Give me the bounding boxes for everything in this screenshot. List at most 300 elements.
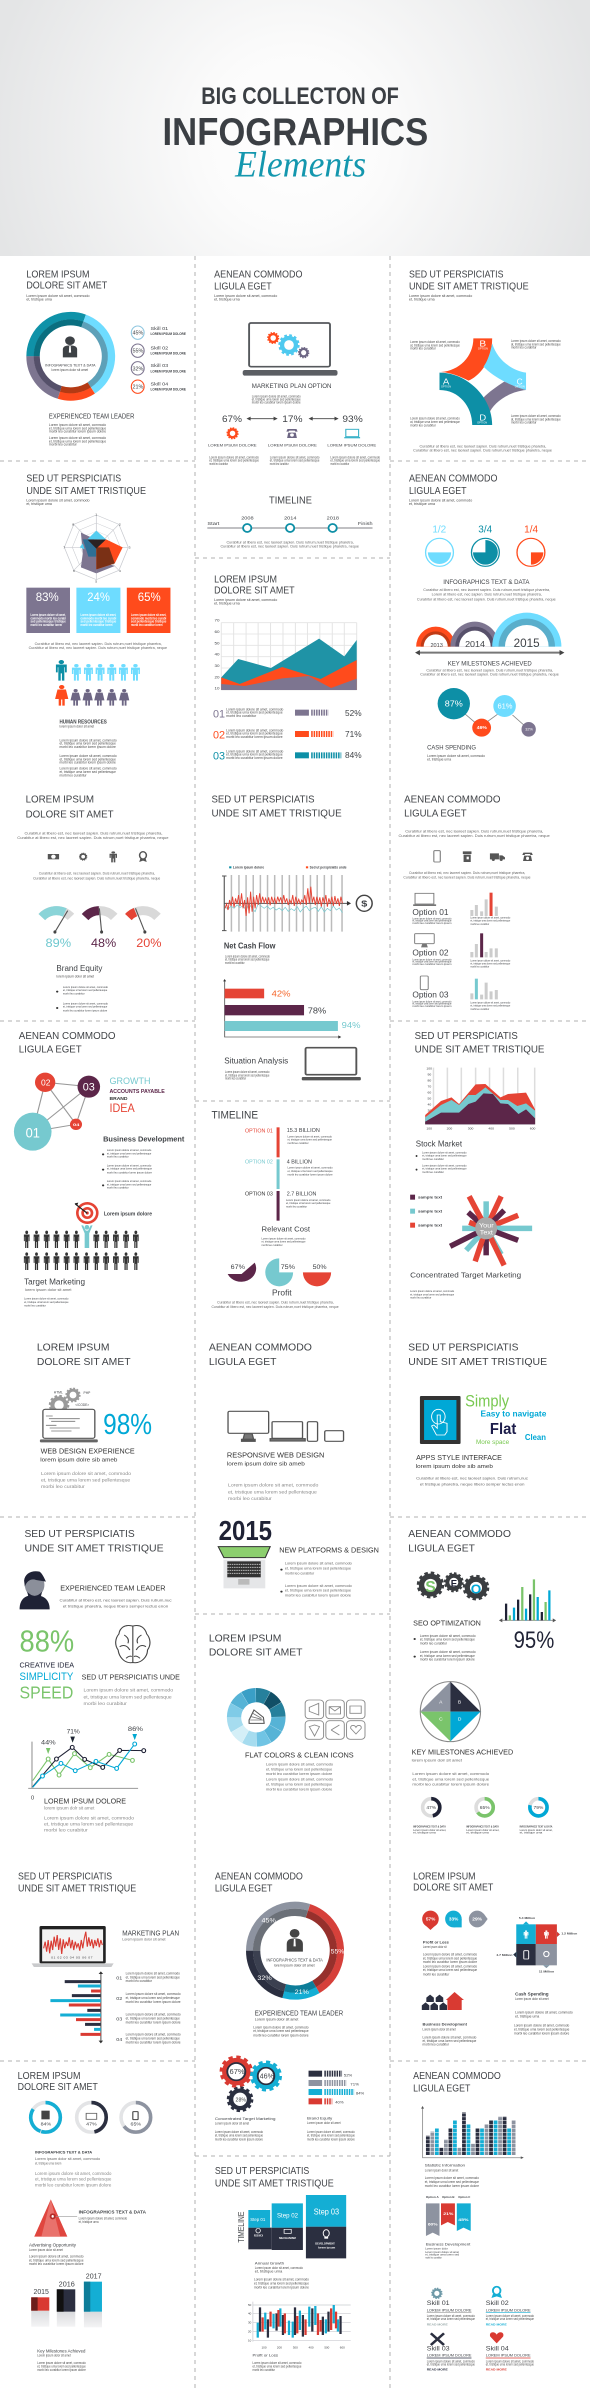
key milestones text: morbi leo curabitur lorem ipsum dolore (37, 2368, 86, 2372)
text block: INFOGRAPHICS TEXT & DATA (35, 2150, 92, 2154)
stat rows: 84% (345, 750, 362, 760)
icons row (227, 428, 360, 439)
caption (33, 871, 160, 880)
body text: morbi leo curabitur lorem ipsum dolore (266, 1771, 332, 1776)
bullets: Lorem ipsum dolore sit amet, commodo (285, 1561, 352, 1566)
statistic text: et, tristique urna lorem sed pellentesque (425, 2180, 479, 2184)
heading: UNDE SIT AMET TRISTIQUE (409, 281, 529, 292)
area chart: 40 (214, 652, 220, 657)
business development text: Lorem ipsum dolore sit amet, commodo (423, 2036, 476, 2039)
business development text: Lorem ipsum dolore sit amet, commodo (107, 1179, 152, 1183)
heading: SED UT PERSPICIATIS (409, 269, 503, 280)
skills grid: Lorem ipsum dolore sit amet, commodo (427, 2360, 475, 2363)
heading: LOREM IPSUM (26, 794, 94, 805)
square matrix: 1.2 Million (561, 1932, 577, 1936)
title: Elements (234, 144, 366, 185)
step blocks (248, 2195, 346, 2258)
vertical timeline: OPTION 03 (245, 1192, 273, 1197)
cash spending text: morbi leo curabitur lorem ipsum dolore (514, 2032, 569, 2035)
human resources text: morbi leo curabitur (59, 774, 87, 777)
stat: 95% (514, 1627, 554, 1654)
skills grid: Lorem ipsum dolore sit amet, commodo (427, 2314, 475, 2318)
heading (413, 1871, 494, 1893)
bullets: Lorem ipsum dolore sit amet, commodo (285, 1583, 352, 1588)
heading: DOLORE SIT AMET (37, 1357, 131, 1368)
milestone arches (415, 613, 564, 655)
donut chart: 32% (257, 1974, 272, 1982)
stat rows: 02 (213, 728, 225, 741)
numbered notes: morbi leo curabitur (126, 1979, 153, 1983)
numbered notes (116, 1972, 181, 2044)
concentrated target marketing text: et, tristique urna lorem sed pellentesque (410, 1293, 455, 1296)
caption: Curabitur at libero est, nec laoreet sapien. Duis rutrum,nuet tristique pharetra, (227, 540, 354, 544)
label: lorem ipsum dolre sib ameb (227, 1462, 305, 1468)
annual growth text: et, tristique urna (255, 2270, 282, 2274)
legend (229, 866, 347, 869)
advertising text: Lorem ipsum dolore sit amet, commodo (29, 2255, 84, 2259)
text block: morbi leo curabitur lorem ipsum dolore (35, 2183, 112, 2187)
heading (408, 1342, 547, 1368)
label and bullets: Lorem ipsum dolore sit amet, commodo (420, 1650, 476, 1654)
stat and keywords (20, 1624, 75, 1703)
heading: UNDE SIT AMET TRISTIQUE (24, 1543, 164, 1554)
stat rows: 52% (345, 708, 362, 718)
heading: SED UT PERSPICIATIS (18, 1871, 112, 1882)
icon: brain (116, 1626, 150, 1663)
stacked area chart: 200 (447, 1127, 453, 1130)
area chart: 10 (214, 686, 220, 691)
milestones text: KEY MILESTONES ACHIEVED (412, 1748, 514, 1756)
brand equity text: Lorem ipsum dolore sit amet, commodo (63, 985, 108, 989)
radial burst chart (450, 1196, 532, 1265)
option labels: LOREM IPSUM DOLORE (208, 443, 257, 448)
network diagram: 01 (26, 1125, 40, 1141)
option 3: et, tristique urna lorem sed pellentesque (470, 1005, 511, 1008)
human resources text: Lorem ipsum dolore sit amet, commodo (59, 767, 117, 771)
option 1: et, tristique urna lorem sed pellentesque (412, 920, 452, 923)
donut label (45, 363, 96, 372)
leaf notes: at, tristique urna lorem sed pellentesque (410, 420, 460, 424)
candlestick chart: 200 (277, 2346, 282, 2349)
area chart: 70 (214, 618, 220, 623)
key milestones text: Lorem ipsum dolor sit amet (37, 2354, 71, 2358)
stat and keywords: SPEED (20, 1683, 73, 1703)
option 3: et, tristique urna lorem sed pellentesque (412, 1003, 452, 1006)
donut label: INFOGRAPHICS TEXT & DATA (266, 1958, 324, 1962)
line chart: 0 (31, 1796, 34, 1801)
option 2: Lorem ipsum dolore sit amet, commodo (470, 960, 511, 963)
word list: IDEA (109, 1101, 135, 1115)
vertical timeline: et, tristique urna lorem sed pellentesque (286, 1201, 331, 1205)
icon: tablet with hand (420, 1396, 461, 1444)
net cash flow text: morbi leo curabitur (225, 961, 245, 965)
area chart (214, 618, 357, 691)
SEO gears: O (471, 1582, 481, 1597)
sub text: Lorem ipsum dolore sit amet, commodo (84, 1688, 174, 1693)
stacked area chart: 100 (426, 1127, 432, 1130)
profit or loss text: Lorem ipsum dolore sit amet, commodo (252, 2361, 301, 2365)
target marketing text: lorem ipsum dolor sit amet (25, 1287, 72, 1292)
label: MARKETING PLAN (122, 1929, 179, 1938)
caption: Curabitur at libero est, nec laoreet sapien. Duis rutrum,nuet tristique pharetra, neque (398, 833, 550, 838)
stat rows: et, tristique urna lorem sed pellentesque (226, 732, 283, 736)
profit text (211, 1288, 339, 1309)
numbered notes: 03 (116, 2017, 123, 2023)
heading (215, 1871, 303, 1894)
stat cards: commodo morbi leo curabi (30, 617, 66, 620)
business development text: Business Development (103, 1135, 185, 1144)
3D bar chart: 2015 (33, 2287, 49, 2296)
diagram: four leaves: OPTION (515, 386, 525, 389)
option 2: et, tristique urna lorem sed pellentesque (470, 963, 511, 966)
stat rows: et, tristique urna lorem sed pellentesque (226, 753, 283, 757)
skills grid: Skill 02 (486, 2299, 509, 2307)
stacked area chart: 80 (427, 1079, 431, 1083)
square matrix (496, 1916, 577, 1974)
pin badges: 29% (472, 1917, 483, 1923)
panel: team leader donut (15, 269, 186, 447)
stat cards: sed pellentesque tristique (30, 620, 66, 624)
pin badges: 33% (449, 1917, 459, 1923)
business development text (423, 2022, 476, 2047)
intro text: et, tristique urna (409, 298, 435, 301)
stacked area chart: 500 (509, 1127, 515, 1130)
progress rings: 65% (131, 2122, 141, 2127)
stacked area chart: 90 (427, 1073, 431, 1077)
intro text: Lorem ipsum dolore sit amet, commodo (26, 294, 90, 298)
leaf notes: Lorem ipsum dolore sit amet, commodo (410, 417, 460, 421)
human resources text: et, tristique urna lorem sed pellentesque (59, 770, 116, 774)
leaf notes: morbi leo curabitur (511, 346, 537, 350)
skills list: 21% (132, 385, 144, 391)
leaf notes: morbi leo curabitur (511, 421, 537, 425)
body text: et, tristique urna lorem sed pellentesque (228, 1490, 317, 1494)
option 2: morbi leo curabitur (470, 966, 489, 969)
step blocks: DEVELOPMENT (315, 2242, 335, 2245)
donut chart: 55% (331, 1948, 345, 1955)
business development text: morbi leo curabitur (107, 1186, 129, 1190)
option labels: LOREM IPSUM DOLORE (327, 443, 376, 448)
leaf notes: morbi leo curabitur (410, 347, 436, 351)
panel: pins, squares, houses (413, 1871, 577, 2047)
small donuts: 65% (480, 1805, 490, 1810)
key milestones text: Lorem ipsum dolore sit amet, commodo (37, 2361, 86, 2365)
caption: Lorem at libero est, nec sapien. Duis rutrum,nuet tristique pharetra, (432, 592, 542, 597)
human resources text: morbi leo curabitur lorem ipsum dolore (59, 761, 116, 765)
pie charts: 50% (313, 1263, 327, 1271)
option descriptions: Lorem ipsum dolore sit amet, commodo (270, 456, 319, 459)
panel: gears and bars (215, 2058, 365, 2141)
area chart: 60 (214, 629, 220, 634)
situation analysis text: Lorem ipsum dolore sit amet, commodo (225, 1070, 269, 1074)
heading: SED UT PERSPICIATIS (211, 794, 315, 805)
line chart: 71% (67, 1728, 80, 1736)
heading (24, 1529, 164, 1554)
human resources text: morbi leo curabitur lorem ipsum dolore (59, 745, 116, 749)
skills grid: Skill 03 (427, 2345, 450, 2352)
caption (403, 870, 531, 880)
candlestick chart: 300 (293, 2346, 298, 2349)
human resources text: et, tristique urna lorem sed pellentesque (59, 758, 116, 761)
profit or loss text (423, 1940, 477, 1976)
progress rings: 84% (41, 2122, 51, 2127)
relevant cost text: morbi leo curabitur (262, 1243, 283, 1247)
donut label (266, 1958, 324, 1967)
panel: net cash flow and situation analysis (211, 794, 372, 1081)
panel: statistics, ribbons, skills (413, 2071, 534, 2372)
diagram: four leaves: A (443, 377, 450, 386)
milestone arches: 2013 (430, 643, 443, 649)
business development text: Lorem ipsum dolore sit amet (425, 2250, 459, 2254)
annual growth text: Lorem ipsum dolor sit amet, commodo (255, 2266, 303, 2270)
caption (398, 829, 550, 838)
small donuts: 47% (426, 1805, 436, 1810)
milestones text (412, 1748, 514, 1787)
option descriptions: morbi leo curabitur (209, 462, 229, 466)
panel: stock market and concentrated target marketing (410, 1031, 544, 1300)
panel: rings, triangle, 3D bars (18, 2071, 151, 2372)
candlestick chart: 10 (248, 2339, 252, 2342)
icon: laptop with gears (243, 323, 338, 376)
stat rows: 71% (345, 729, 362, 739)
horizontal bar chart: 94% (342, 1020, 360, 1030)
stat cards: morbi leo curabitur lorem (81, 623, 113, 627)
chart text (44, 1797, 134, 1833)
heading (215, 2166, 334, 2189)
heading: DOLORE SIT AMET (26, 809, 114, 820)
heading: LIGULA EGET (214, 281, 272, 292)
annual growth text: Lorem ipsum dolore sit amet, commodo (254, 2278, 309, 2282)
human resources text: Lorem ipsum dolore sit amet, commodo (59, 754, 117, 758)
caption: Curabitur at libero est, nec laoreet sapien. Duis rutrum,nuet tristique pharetra, (423, 587, 550, 592)
label: lorem ipsum dolre sib ameb (40, 1458, 118, 1463)
panel: timeline (207, 495, 373, 548)
option 2: Option 02 (412, 948, 449, 958)
panel: fractions, milestones, cash spending (409, 473, 564, 761)
key milestones text (37, 2349, 86, 2372)
panel: business development and target marketing (14, 1031, 185, 1307)
heading (18, 1871, 136, 1894)
skills grid: et, tristique urna lorem sed pellentesque (486, 2317, 534, 2321)
panel: radar and human resources (26, 473, 170, 777)
candlestick chart (248, 2302, 351, 2349)
progress rings (27, 2098, 151, 2136)
square matrix: 4.7 Million (496, 1953, 513, 1957)
stat rows: morbi leo curabitur (226, 714, 257, 718)
heading: SED UT PERSPICIATIS (24, 1529, 135, 1540)
timeline track (207, 516, 373, 532)
donut label: INFOGRAPHICS TEXT & DATA (45, 363, 96, 367)
square matrix: 11 Million (539, 1970, 554, 1974)
vertical timeline: 4 BILLION (287, 1160, 312, 1165)
statistic text (425, 2163, 479, 2188)
3D bar chart (31, 2272, 102, 2327)
stat rows: Lorem ipsum dolore sit amet, commodo (226, 708, 283, 711)
situation analysis text: et, tristique urna lorem sed pellentesque (225, 1074, 269, 1077)
title: INFOGRAPHICS (163, 109, 428, 153)
intro text: et, tristique urna (214, 298, 240, 301)
heading: SED UT PERSPICIATIS (415, 1031, 518, 1042)
stat rows: morbi leo curabitur lorem ipsum dolore (226, 756, 283, 760)
ribbons: 60% (428, 2222, 438, 2226)
horizontal bar chart (223, 979, 360, 1039)
intro text (26, 294, 90, 301)
ribbons (426, 2195, 471, 2236)
caption: Curabitur at libero est, nec laoreet sapien. Duis rutrum,nuet tristique pharetra, (420, 444, 546, 449)
heading (18, 2071, 98, 2093)
stacked area chart: 100 (426, 1067, 432, 1071)
left text: Concentrated Target Marketing (215, 2116, 276, 2121)
stacked area chart: 20 (427, 1115, 431, 1119)
area chart: 30 (214, 663, 220, 668)
heading: LOREM IPSUM (18, 2071, 81, 2082)
option descriptions: Lorem ipsum dolore sit amet, commodo (209, 456, 259, 459)
stat rows (213, 707, 362, 762)
net cash flow text: et, tristique urna lorem sed pellentesque (225, 958, 269, 962)
vertical timeline: et, tristique urna lorem sed pellentesque (287, 1138, 332, 1142)
skills list: 45% (132, 331, 144, 337)
bar chart (499, 1579, 556, 1622)
human resources text: Lorem ipsum dolore sit amet, commodo (59, 739, 117, 742)
business development text: et, tristique urna lorem sed pellentesque (423, 2039, 476, 2043)
icon: dollar: $ (361, 899, 367, 909)
pin badges: 57% (426, 1917, 436, 1923)
stat rows: Lorem ipsum dolore sit amet, commodo (226, 729, 283, 732)
intro text: Lorem ipsum dolore sit amet, commodo (409, 294, 472, 298)
triangle text: Lorem ipsum dolore sit amet, commodo (79, 2217, 127, 2221)
pie charts: 67% (231, 1263, 246, 1271)
small donuts (423, 1799, 547, 1816)
radar chart (63, 513, 131, 583)
cash spending text (514, 1992, 573, 2035)
situation analysis text (224, 1056, 288, 1081)
option 3: morbi leo curabitur (470, 1008, 489, 1011)
skills list: Skill 03 (151, 363, 168, 369)
label and bullets: et, tristique urna lorem sed pellentesque (420, 1654, 475, 1658)
business development text: Lorem ipsum dolore sit amet, commodo (107, 1148, 152, 1152)
skills grid: Lorem ipsum dolore sit amet, commodo (486, 2360, 534, 2363)
label (416, 1453, 502, 1470)
heading (408, 1529, 511, 1554)
panel: marketing plan laptop (18, 1871, 181, 2044)
radar chart: 7 (63, 546, 65, 549)
title (163, 83, 428, 185)
heading: AENEAN COMMODO (413, 2071, 501, 2082)
striped bars: 84% (356, 2091, 365, 2096)
caption: Curabitur at libero est, nec laoreet sapien. Duis rutrum,nuet tristique pharetra, (24, 831, 163, 836)
stacked area chart: 70 (427, 1085, 431, 1089)
step blocks: lorem ipsum (318, 2246, 336, 2249)
milestones text: morbi leo curabitur lorem ipsum dolore (412, 1782, 489, 1787)
stat rows: morbi leo curabitur lorem ipsum dolore (226, 735, 283, 739)
option 1: et, tristique urna lorem sed pellentesque (470, 920, 511, 923)
icon: houses (422, 1992, 464, 2010)
heading: LIGULA EGET (413, 2083, 471, 2094)
business development text: morbi leo curabitur lorem ipsum dolore (107, 1171, 152, 1174)
brand equity text: Brand Equity (56, 963, 103, 973)
intro text: Lorem ipsum dolore sit amet, commodo (214, 294, 277, 298)
stat cards: 83% (36, 590, 59, 604)
word cloud: More space (476, 1439, 510, 1446)
business development text: morbi leo curabitur (425, 2256, 442, 2260)
business development text: morbi leo curabitur (423, 2043, 450, 2047)
label and bullets (413, 1619, 481, 1662)
vertical timeline: Lorem ipsum dolore sit amet, commodo (287, 1166, 333, 1170)
heading (415, 1031, 544, 1055)
candlestick chart: 100 (262, 2346, 267, 2349)
label (40, 1447, 135, 1463)
panel: apps style interface (408, 1342, 547, 1486)
leaf notes: at, tristique urna lorem sed pellentesque (410, 344, 460, 347)
panel: billions timeline and profit (211, 1108, 339, 1309)
gear percentages (222, 2058, 280, 2110)
striped bars: 40% (335, 2100, 344, 2104)
business development text: Business Development (426, 2242, 471, 2247)
diagram: four leaves: D (479, 413, 486, 422)
skills grid: READ MORE (486, 2323, 507, 2326)
donut chart (233, 1889, 357, 2013)
icon: team leader (20, 1571, 50, 1609)
panel: creative idea (20, 1529, 180, 1833)
caption: Curabitur at libero est, nec laoreet sapien. Duis rutrum,nuet tristique pharetra, (405, 829, 543, 833)
option descriptions: Lorem ipsum dolore sit amet, commodo (330, 456, 380, 459)
donut chart: 45% (262, 1917, 277, 1925)
chart text: LOREM IPSUM DOLORE (44, 1797, 126, 1806)
numbered notes: 01 (116, 1976, 123, 1981)
donut captions: Lorem ipsum dolor sit amet, (413, 1828, 446, 1832)
option 3: morbi leo curabitur lorem ipsum (412, 1005, 452, 1008)
stat rows: et, tristique urna lorem sed pellentesque (226, 711, 283, 715)
target marketing text: morbi leo curabitur (24, 1304, 46, 1307)
intro text: Lorem ipsum dolore sit amet, commodo (214, 598, 277, 602)
profit or loss text: et, tristique urna lorem sed pellentesque (423, 1957, 477, 1960)
vertical timeline: morbi leo curabitur (286, 1205, 307, 1208)
business development text: Business Development (423, 2022, 468, 2027)
right text (307, 2116, 355, 2141)
stock market text: et, tristique urna lorem sed pellentesque (422, 1154, 467, 1158)
body text: morbi leo curabitur (228, 1496, 272, 1501)
milestones text: et, tristique urna lorem sed pellentesque (412, 1777, 489, 1781)
heading: LIGULA EGET (215, 1883, 273, 1894)
icon row (48, 851, 147, 862)
diagram: four leaves (439, 338, 526, 425)
human resources text: HUMAN RESOURCES (59, 720, 107, 725)
option 3 (412, 976, 511, 1011)
heading: AENEAN COMMODO (404, 794, 500, 805)
body text: et tristique pharetra, neque libero semper lectus enon (420, 1482, 525, 1486)
donut chart: 21% (295, 1988, 310, 1996)
radar chart: 5 (95, 580, 97, 583)
caption: Curabitur at libero est, nec laoreet sapien. Duis rutrum,nuet tristique pharetra, neque (221, 544, 359, 548)
ribbons: Option A (426, 2195, 439, 2199)
striped bars (309, 2071, 365, 2104)
cash spending text: CASH SPENDING (427, 745, 476, 752)
stat and keywords: CREATIVE IDEA (20, 1661, 75, 1669)
diagram: four leaves: B (479, 339, 486, 349)
body text (228, 1483, 319, 1501)
stock market text: morbi leo curabitur (422, 1157, 444, 1161)
percent comparison row (222, 414, 363, 425)
right text: et, tristique urna lorem sed pellentesque (307, 2134, 355, 2137)
left text: Lorem ipsum dolor sit amet (215, 2122, 249, 2126)
stat and keywords: 88% (20, 1624, 74, 1658)
cash spending text: et, tristique urna (427, 758, 451, 761)
pie charts: 75% (281, 1263, 296, 1271)
laptop with chart (32, 1926, 114, 1967)
radar chart: 4 (119, 569, 121, 573)
ribbons: Option C (458, 2195, 470, 2199)
cash spending text: et, tristique urna lorem sed pellentesque (514, 2028, 569, 2031)
